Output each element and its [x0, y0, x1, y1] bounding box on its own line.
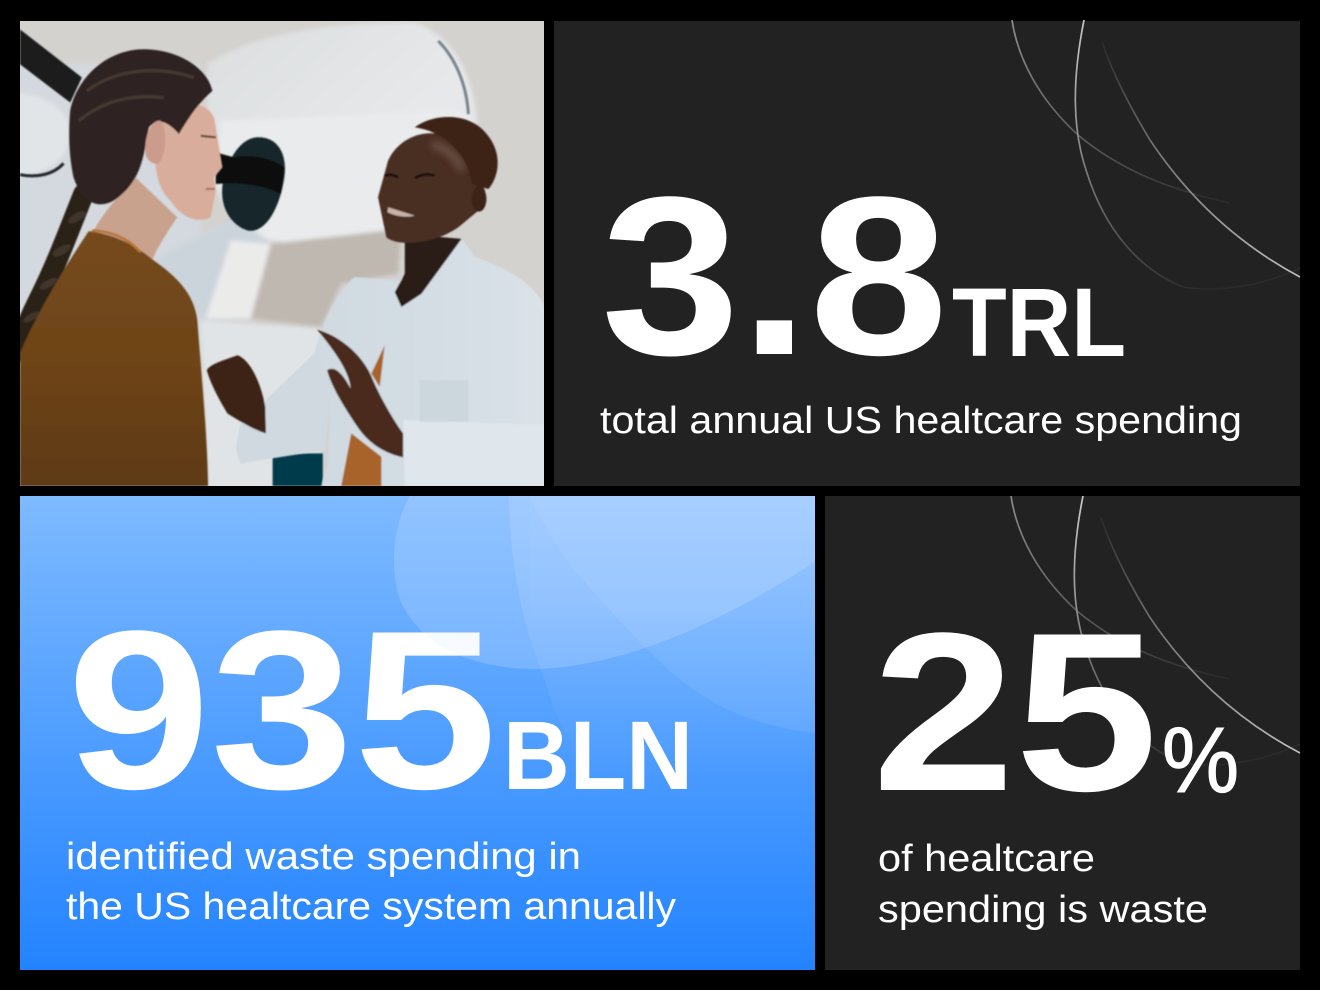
panel: total annual spending [554, 20, 1300, 486]
caption [878, 838, 1208, 931]
figure: 25%: 25 [872, 585, 1158, 838]
scanner room background [13, 14, 552, 493]
figure: 25%: % [1162, 708, 1239, 812]
caption: identified waste spending in [66, 836, 581, 878]
panel: share of waste [825, 496, 1300, 970]
scanner details [20, 29, 468, 486]
caption [66, 836, 676, 928]
caption: spending is waste [878, 889, 1208, 931]
figure: 3.8 TRL [601, 149, 1126, 402]
figure: 3.8 TRL: TRL [952, 268, 1126, 377]
panel background [554, 21, 1300, 486]
translucent overlapping shapes [394, 496, 815, 733]
panel background [20, 496, 815, 970]
decorative arcs [1011, 496, 1300, 765]
caption: total annual US healtcare spending [600, 400, 1242, 442]
caption: of healtcare [878, 838, 1095, 880]
figure: 935 BLN: 935 [67, 583, 497, 836]
photo: doctor talking with a patient beside a scanner [13, 14, 552, 493]
figure: 3.8 TRL: 3.8 [601, 149, 948, 402]
figure: 935 BLN: BLN [503, 701, 693, 810]
panel: identified waste [20, 496, 815, 970]
caption: the US healtcare system annually [66, 886, 676, 928]
figure: 25% [872, 585, 1239, 838]
figure: 935 BLN [67, 583, 693, 836]
doctor in white coat [207, 117, 545, 486]
decorative arcs [1012, 20, 1300, 289]
patient with braid and brown cardigan [15, 49, 222, 486]
panel background [825, 496, 1300, 970]
